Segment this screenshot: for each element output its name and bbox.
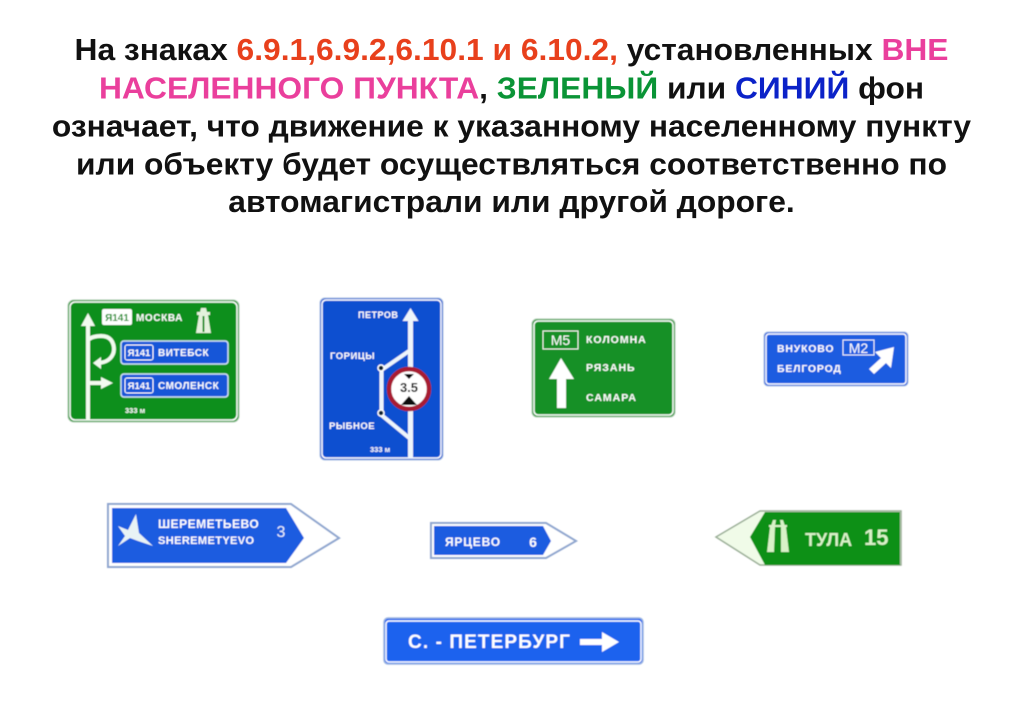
- labels: КОЛОМНА: [586, 334, 647, 346]
- route label A141: Я141: [105, 313, 129, 324]
- sign: blue Sheremetyevo pointer: 3: [277, 524, 286, 541]
- sign: blue Vnukovo, Belgorod: [764, 332, 908, 386]
- sign: blue Yartsevo pointer: 6: [529, 534, 537, 550]
- label: Moscow: МОСКВА: [136, 313, 183, 324]
- sign: green 6.10.1 Kolomna, Ryazan, Samara: САМАРА: [586, 392, 637, 404]
- title: НАСЕЛЕННОГО ПУНКТА, ЗЕЛЕНЫЙ или СИНИЙ фон: [99, 70, 924, 105]
- label: С. - ПЕТЕРБУРГ: [408, 632, 571, 653]
- labels: ЯРЦЕВО: [445, 535, 501, 549]
- route label A141: [102, 309, 132, 325]
- labels: ТУЛА: [805, 530, 852, 550]
- sign: blue 6.9.2 Petrov, Goritsy, Rybnoe: [320, 298, 443, 460]
- sign: blue 6.9.2 Petrov, Goritsy, Rybnoe: ГОРИЦЫ: [330, 351, 375, 362]
- panel: Vitebsk: ВИТЕБСК: [158, 348, 209, 359]
- sign: blue 6.9.2 Petrov, Goritsy, Rybnoe: РЫБНОЕ: [329, 421, 375, 432]
- panel: Smolensk: [121, 374, 228, 397]
- panel: Vitebsk: Я141: [128, 348, 151, 359]
- route label M5: М5: [551, 332, 570, 348]
- arrow: up: [549, 358, 574, 408]
- sign: green 6.9.1 Moscow, Vitebsk, Smolensk: [68, 300, 239, 422]
- icon: height limit 3.5: [389, 369, 429, 409]
- sign: blue St. Petersburg: [384, 618, 643, 664]
- title: На знаках 6.9.1,6.9.2,6.10.1 и 6.10.2, установленных ВНЕ: [75, 33, 948, 67]
- sign: blue Sheremetyevo pointer: [108, 504, 339, 567]
- roads: [378, 308, 418, 458]
- sign: green Tula pointer: 15: [864, 525, 888, 550]
- arrow: up-right: [869, 347, 894, 374]
- icon: motorway: [767, 520, 789, 552]
- label: distance: 333 м: [125, 406, 146, 415]
- panel: Smolensk: Я141: [128, 381, 151, 392]
- labels: ШЕРЕМЕТЬЕВО: [158, 517, 259, 531]
- title: [52, 33, 972, 219]
- route label M5: [543, 331, 578, 349]
- sign: blue Sheremetyevo pointer: SHEREMETYEVO: [158, 535, 255, 547]
- arrow: straight road and branches: [81, 313, 114, 420]
- sign: green 6.10.1 Kolomna, Ryazan, Samara: [532, 319, 675, 417]
- title: означает, что движение к указанному населенному пункту: [52, 109, 972, 143]
- arrow: right: [580, 632, 619, 652]
- icon: motorway: [196, 308, 211, 333]
- sign: blue 6.9.2 Petrov, Goritsy, Rybnoe: 333 м: [370, 445, 391, 454]
- labels: ВНУКОВО: [777, 343, 834, 355]
- panel: Vitebsk: [121, 341, 228, 364]
- sign: blue Yartsevo pointer: [431, 523, 576, 558]
- icon: height limit 3.5: 3.5: [400, 380, 418, 395]
- title: автомагистрали или другой дороге.: [228, 185, 795, 219]
- title: или объекту будет осуществляться соответственно по: [76, 147, 947, 181]
- labels: ПЕТРОВ: [358, 310, 398, 320]
- route label M2: М2: [849, 340, 868, 356]
- route label M2: [843, 340, 874, 356]
- sign: green 6.10.1 Kolomna, Ryazan, Samara: РЯЗАНЬ: [586, 362, 636, 374]
- panel: Smolensk: СМОЛЕНСК: [158, 381, 220, 392]
- sign: green Tula pointer: [716, 511, 901, 565]
- sign: blue Vnukovo, Belgorod: БЕЛГОРОД: [777, 363, 842, 375]
- icon: airplane: [118, 514, 153, 546]
